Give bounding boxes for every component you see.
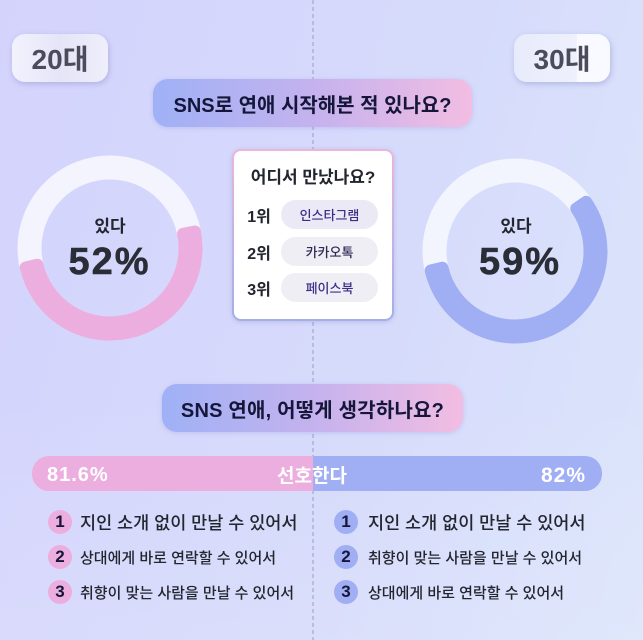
heading: SNS dating start question: SNS로 연애 시작해본 적 있나요?: [174, 94, 451, 116]
bar segment: 30s: [313, 456, 602, 491]
item 2 text: 상대에게 바로 연락할 수 있어서: [80, 550, 276, 566]
rank 1 label: 1위: [247, 208, 271, 226]
item 1 number: [48, 510, 72, 534]
donut chart: 20s 52%: 52%: [68, 241, 151, 283]
rank 3 pill: [281, 273, 378, 302]
rank 3 pill: 페이스북: [306, 281, 353, 296]
item 1 text: 지인 소개 없이 만날 수 있어서: [80, 512, 298, 532]
donut chart: 20s 52%: [18, 156, 202, 341]
item 3 number: [334, 580, 358, 604]
rank 3 label: 3위: [247, 282, 271, 298]
heading: opinion on SNS dating: [162, 384, 463, 432]
donut chart: 20s 52%: 있다: [94, 217, 126, 236]
item 2 text: 취향이 맞는 사람을 만날 수 있어서: [368, 550, 582, 566]
item 1 number: 1: [55, 512, 65, 531]
value: 82%: 82%: [541, 464, 586, 486]
item 2 number: 2: [55, 547, 65, 566]
item 2 number: [48, 545, 72, 569]
rank 1 pill: 인스타그램: [300, 208, 359, 223]
donut chart: 30s 59%: [422, 158, 608, 344]
item 3 number: 3: [341, 582, 351, 601]
tab: 20대: 20대: [32, 44, 88, 75]
item 3 text: 상대에게 바로 연락할 수 있어서: [368, 584, 564, 602]
value: 81.6%: 81.6%: [47, 464, 109, 486]
rank 2 label: 2위: [247, 246, 271, 262]
item 3 number: [48, 580, 72, 604]
item 2 number: [334, 545, 358, 569]
rank 1 pill: [281, 200, 378, 229]
donut chart: 30s 59%: 있다: [500, 217, 532, 236]
item 3 number: 3: [55, 582, 65, 601]
bar segment: 20s: [32, 456, 313, 491]
list: 20s reasons: [48, 510, 298, 604]
heading: SNS dating start question: [153, 79, 472, 127]
tab: 20대: [12, 34, 108, 82]
item 1 text: 지인 소개 없이 만날 수 있어서: [368, 512, 586, 532]
item 3 text: 취향이 맞는 사람을 만날 수 있어서: [80, 584, 294, 602]
donut chart: 30s 59%: 59%: [479, 241, 561, 283]
tab: 30대: [514, 34, 610, 82]
panel title: 어디서 만났나요?: [251, 168, 375, 186]
heading: opinion on SNS dating: SNS 연애, 어떻게 생각하나요?: [181, 400, 444, 422]
panel: where did you meet: [232, 149, 394, 321]
item 2 number: 2: [341, 547, 351, 566]
item 1 number: 1: [341, 512, 351, 531]
item 1 number: [334, 510, 358, 534]
rank 2 pill: [281, 237, 378, 266]
label: 선호한다: 선호한다: [277, 466, 347, 487]
list: 30s reasons: [334, 510, 586, 604]
panel inner: [234, 151, 392, 319]
tab: 30대: 30대: [534, 44, 590, 75]
bar: prefer comparison: [32, 456, 602, 491]
rank 2 pill: 카카오톡: [306, 245, 353, 260]
